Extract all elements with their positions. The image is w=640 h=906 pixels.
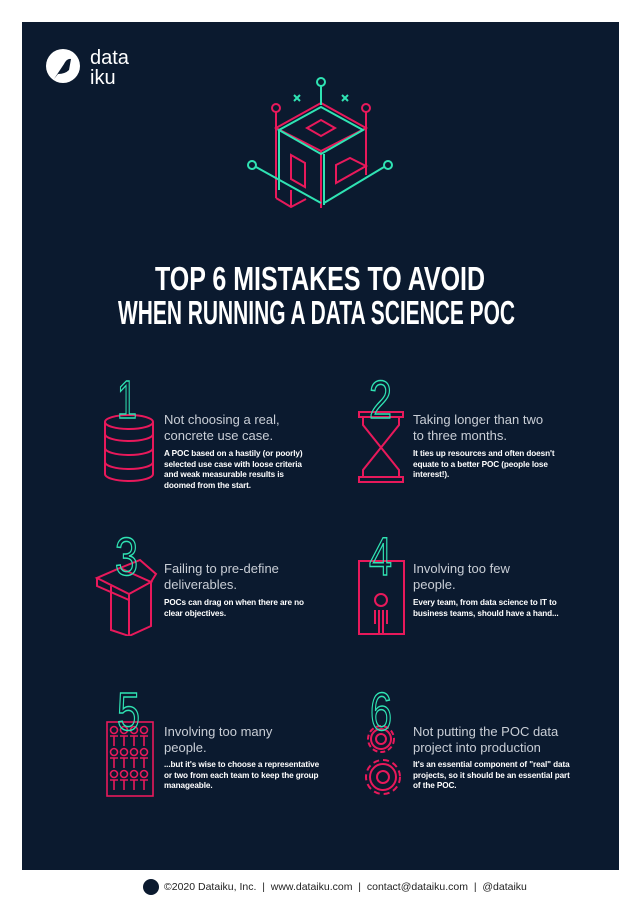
body: POCs can drag on when there are no clear objectives. (164, 598, 304, 618)
heading (413, 561, 510, 592)
body: Every team, from data science to IT to business teams, should have a hand... (413, 598, 559, 618)
heading (413, 412, 543, 443)
heading (164, 412, 280, 443)
logo: data (90, 47, 130, 69)
title (118, 262, 515, 328)
icon: gears with 6: 6 (370, 682, 392, 742)
heading: deliverables. (164, 577, 237, 592)
heading: concrete use case. (164, 428, 273, 443)
logo (46, 47, 130, 86)
icon: POC robot cube (247, 77, 393, 208)
item 4 (358, 528, 559, 635)
heading (413, 724, 558, 755)
item 5 (106, 682, 319, 797)
heading: people. (413, 577, 456, 592)
body: A POC based on a hastily (or poorly) selected use case with loose criteria and weak measurable results is doomed from the start. (164, 449, 302, 490)
body: ...but it's wise to choose a representative or two from each team to keep the group manageable. (164, 760, 319, 790)
icon: hourglass with 2 (358, 372, 404, 483)
item 1 (104, 372, 302, 490)
heading: Not choosing a real, (164, 412, 280, 427)
icon: grid of people with 5 (106, 682, 154, 797)
icon: stacked discs with 1 (104, 372, 154, 482)
item 6 (365, 682, 570, 795)
heading: Taking longer than two (413, 412, 543, 427)
icon: door with person and 4: 4 (369, 528, 392, 587)
icon: gears with 6 (365, 682, 401, 795)
heading: Involving too few (413, 561, 510, 576)
heading: to three months. (413, 428, 507, 443)
heading: Not putting the POC data (413, 724, 558, 739)
footer: ©2020 Dataiku, Inc. | www.dataiku.com | contact@dataiku.com | @dataiku (164, 881, 527, 893)
icon: open box with 3 (94, 528, 158, 636)
body: It ties up resources and often doesn't equate to a better POC (people lose interest!). (413, 449, 554, 479)
icon: grid of people with 5: 5 (117, 682, 140, 742)
heading: project into production (413, 740, 541, 755)
item 2 (358, 372, 554, 483)
icon: open box with 3: 3 (115, 528, 138, 587)
heading: Involving too many (164, 724, 272, 739)
icon: footer logo (143, 879, 159, 895)
heading (164, 561, 279, 592)
heading (164, 724, 272, 755)
icon: door with person and 4 (358, 528, 405, 635)
heading: Failing to pre-define (164, 561, 279, 576)
body: It's an essential component of "real" data projects, so it should be an essential part of the POC. (413, 760, 570, 790)
heading: people. (164, 740, 207, 755)
item 3 (94, 528, 304, 636)
